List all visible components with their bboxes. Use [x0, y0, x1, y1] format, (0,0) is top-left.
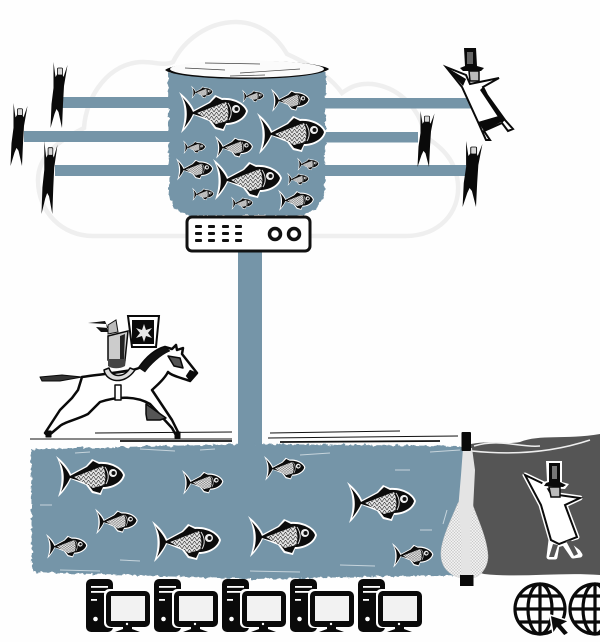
panel wave lines	[472, 440, 590, 453]
pot rim	[165, 61, 329, 79]
person far left	[10, 103, 28, 166]
dark panel: outside network	[471, 434, 600, 575]
ground line	[30, 431, 458, 442]
lower fish school	[46, 456, 433, 568]
cursor	[550, 615, 569, 636]
water speckles	[40, 449, 460, 572]
globe right	[570, 584, 600, 634]
person far right	[463, 141, 482, 207]
pot rim ripples	[185, 63, 300, 76]
server box	[187, 217, 310, 251]
stocking figure	[441, 432, 488, 586]
pot body	[168, 72, 326, 216]
person right middle	[418, 111, 434, 167]
top hat man upper	[446, 48, 513, 140]
pot of fish	[165, 60, 329, 216]
rider	[88, 320, 128, 368]
top hat man on dark panel	[525, 461, 580, 557]
horse	[40, 345, 197, 438]
computers row	[86, 579, 422, 632]
person upper left	[50, 62, 68, 128]
globe with cursor	[515, 584, 569, 636]
horizontal pipes	[24, 97, 472, 176]
lower water	[31, 444, 466, 579]
flag	[128, 316, 159, 347]
person lower left	[41, 141, 58, 214]
horse and rider	[40, 316, 197, 438]
cloud outline	[38, 22, 458, 236]
pot fish school	[176, 86, 326, 211]
rim surface	[170, 60, 324, 78]
vertical pipe	[238, 248, 262, 445]
